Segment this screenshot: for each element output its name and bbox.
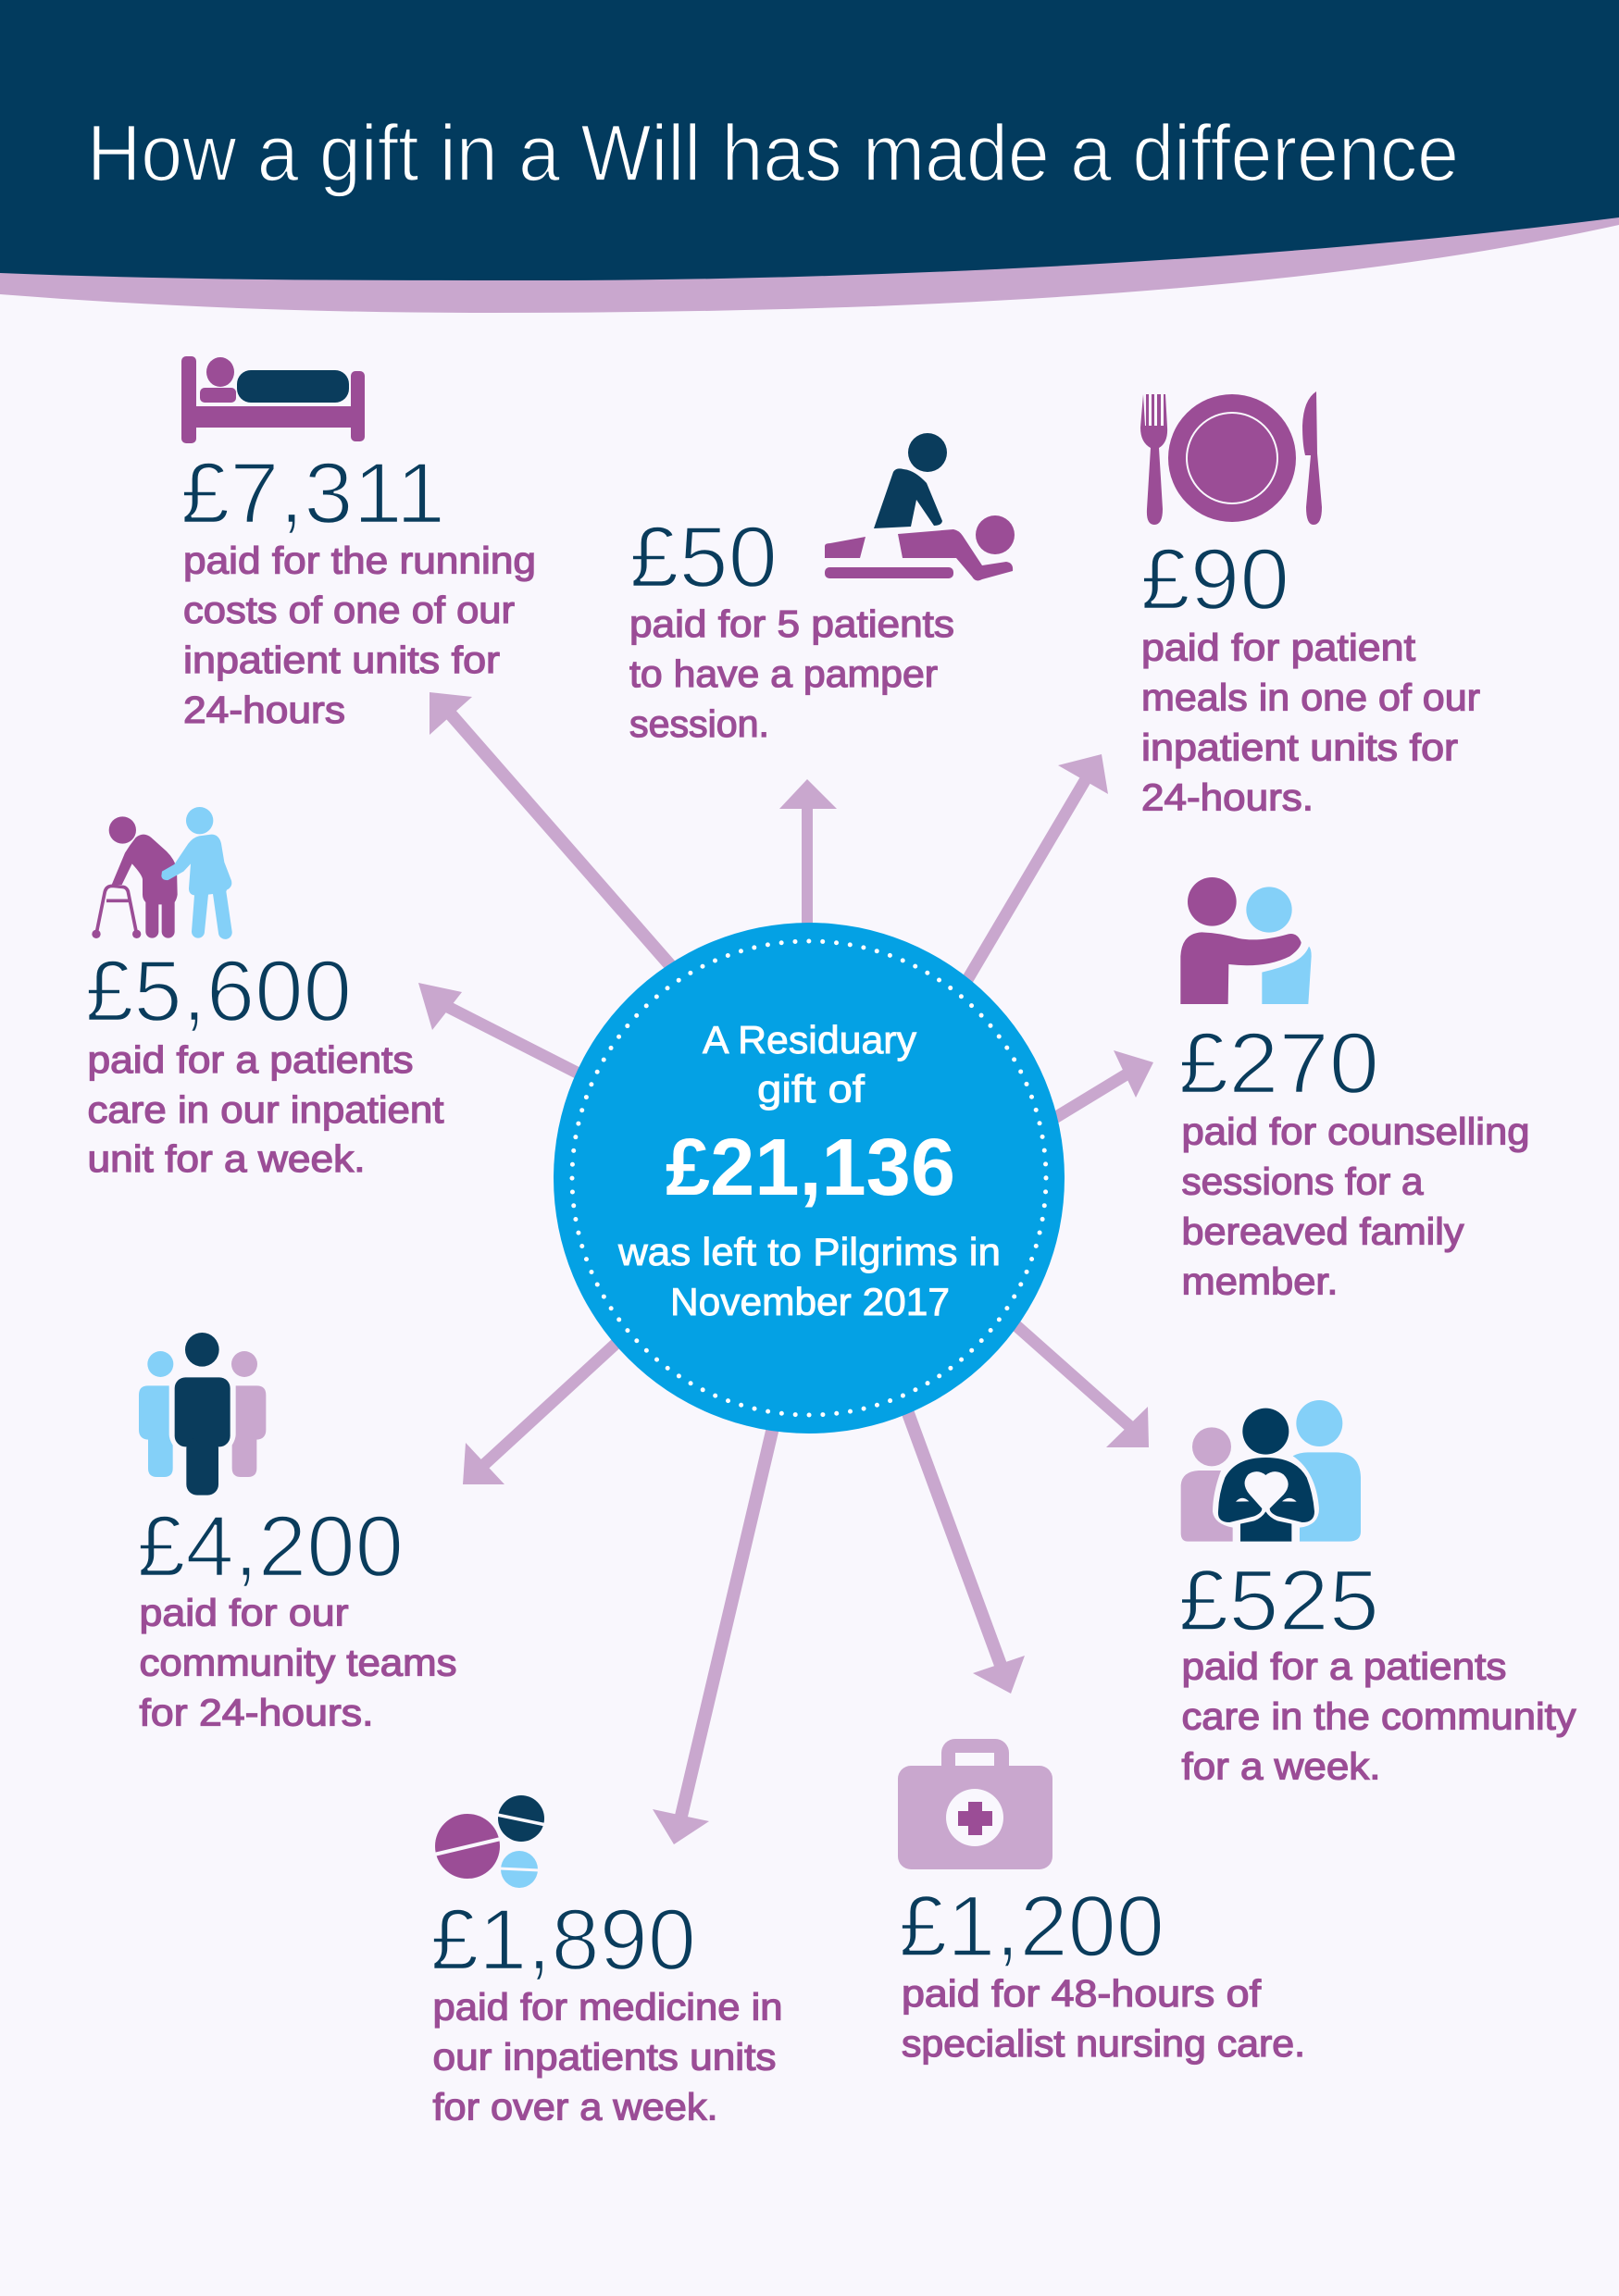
description: community teams bbox=[139, 1642, 457, 1684]
panel: £50 bbox=[629, 433, 1015, 745]
description: care in the community bbox=[1181, 1695, 1576, 1738]
icon: medical case bbox=[898, 1739, 1052, 1869]
description bbox=[902, 1972, 1305, 2065]
description: for over a week. bbox=[433, 2086, 718, 2128]
description bbox=[629, 602, 954, 745]
icon: hospital bed bbox=[181, 356, 365, 443]
panel: £90 bbox=[1140, 391, 1480, 818]
description: for a week. bbox=[1181, 1745, 1381, 1788]
description: to have a pamper bbox=[629, 652, 938, 695]
icon: pills bbox=[434, 1795, 546, 1888]
header banner bbox=[0, 0, 1619, 313]
icon: massage bbox=[825, 433, 1015, 580]
description: inpatient units for bbox=[1141, 726, 1458, 768]
arrow: to £5,600 bbox=[418, 983, 629, 1099]
icon: community team bbox=[139, 1333, 266, 1496]
description: care in our inpatient bbox=[87, 1088, 444, 1131]
description bbox=[183, 539, 536, 731]
description: sessions for a bbox=[1181, 1160, 1424, 1203]
arrow: to £525 bbox=[972, 1286, 1149, 1447]
description bbox=[87, 1038, 444, 1180]
panel: £1,890 bbox=[430, 1795, 783, 2128]
panel: £525 bbox=[1178, 1400, 1576, 1788]
description: bereaved family bbox=[1181, 1210, 1464, 1253]
amount: £7,311 bbox=[181, 444, 445, 541]
description: for 24-hours. bbox=[139, 1692, 374, 1734]
arrow: to £4,200 bbox=[463, 1314, 648, 1484]
panel: £5,600 bbox=[85, 807, 444, 1180]
description: session. bbox=[629, 702, 769, 745]
icon: carer and patient with walker bbox=[92, 807, 232, 939]
description bbox=[1181, 1111, 1529, 1303]
description: meals in one of our bbox=[1141, 676, 1480, 718]
panel: £4,200 bbox=[137, 1333, 457, 1734]
centre circle: residuary gift: November 2017 bbox=[670, 1280, 950, 1323]
panel: £270 bbox=[1178, 877, 1529, 1303]
amount: £50 bbox=[629, 508, 778, 605]
description: paid for our bbox=[139, 1592, 348, 1634]
icon: plate and cutlery bbox=[1140, 391, 1322, 525]
centre circle: residuary gift: was left to Pilgrims in bbox=[617, 1230, 1001, 1273]
centre circle: residuary gift: A Residuary bbox=[703, 1018, 916, 1061]
arrow: to £7,311 bbox=[430, 692, 741, 1046]
description: 24-hours bbox=[183, 689, 345, 731]
centre circle: residuary gift: gift of bbox=[757, 1067, 865, 1111]
description bbox=[1141, 626, 1480, 818]
amount: £1,890 bbox=[430, 1891, 696, 1988]
description: paid for patient bbox=[1141, 626, 1416, 668]
centre circle: residuary gift bbox=[554, 923, 1065, 1433]
description: paid for counselling bbox=[1181, 1111, 1529, 1153]
icon: family with heart bbox=[1181, 1400, 1361, 1542]
arrow: to £50 bbox=[779, 779, 837, 1018]
description: costs of one of our bbox=[183, 589, 515, 631]
amount: £5,600 bbox=[85, 942, 352, 1039]
amount: £90 bbox=[1140, 530, 1289, 627]
arrow: to £270 bbox=[1018, 1050, 1153, 1140]
panel: £1,200 bbox=[898, 1739, 1305, 2065]
description bbox=[433, 1986, 783, 2128]
description: paid for medicine in bbox=[433, 1986, 783, 2029]
panel: £7,311 bbox=[181, 356, 536, 731]
description bbox=[1181, 1645, 1576, 1788]
description: paid for the running bbox=[183, 539, 536, 581]
arrow: to £90 bbox=[926, 754, 1108, 1050]
description: 24-hours. bbox=[1141, 776, 1314, 818]
description: paid for a patients bbox=[87, 1038, 413, 1081]
description: our inpatients units bbox=[433, 2036, 776, 2079]
description: paid for 5 patients bbox=[629, 602, 954, 645]
centre circle: residuary gift: £21,136 bbox=[666, 1123, 955, 1212]
description bbox=[139, 1592, 457, 1734]
arrow: to £1,890 bbox=[653, 1388, 782, 1844]
amount: £525 bbox=[1178, 1551, 1379, 1649]
arrow: to £1,200 bbox=[889, 1360, 1025, 1694]
amount: £4,200 bbox=[137, 1497, 404, 1595]
description: paid for 48-hours of bbox=[902, 1972, 1262, 2015]
description: inpatient units for bbox=[183, 639, 500, 681]
description: specialist nursing care. bbox=[902, 2022, 1305, 2065]
icon: comforting embrace bbox=[1180, 877, 1312, 1004]
description: paid for a patients bbox=[1181, 1645, 1507, 1688]
title: How a gift in a Will has made a difference bbox=[87, 109, 1459, 198]
description: unit for a week. bbox=[87, 1137, 365, 1180]
amount: £1,200 bbox=[899, 1877, 1164, 1975]
amount: £270 bbox=[1178, 1014, 1379, 1111]
description: member. bbox=[1181, 1260, 1339, 1303]
